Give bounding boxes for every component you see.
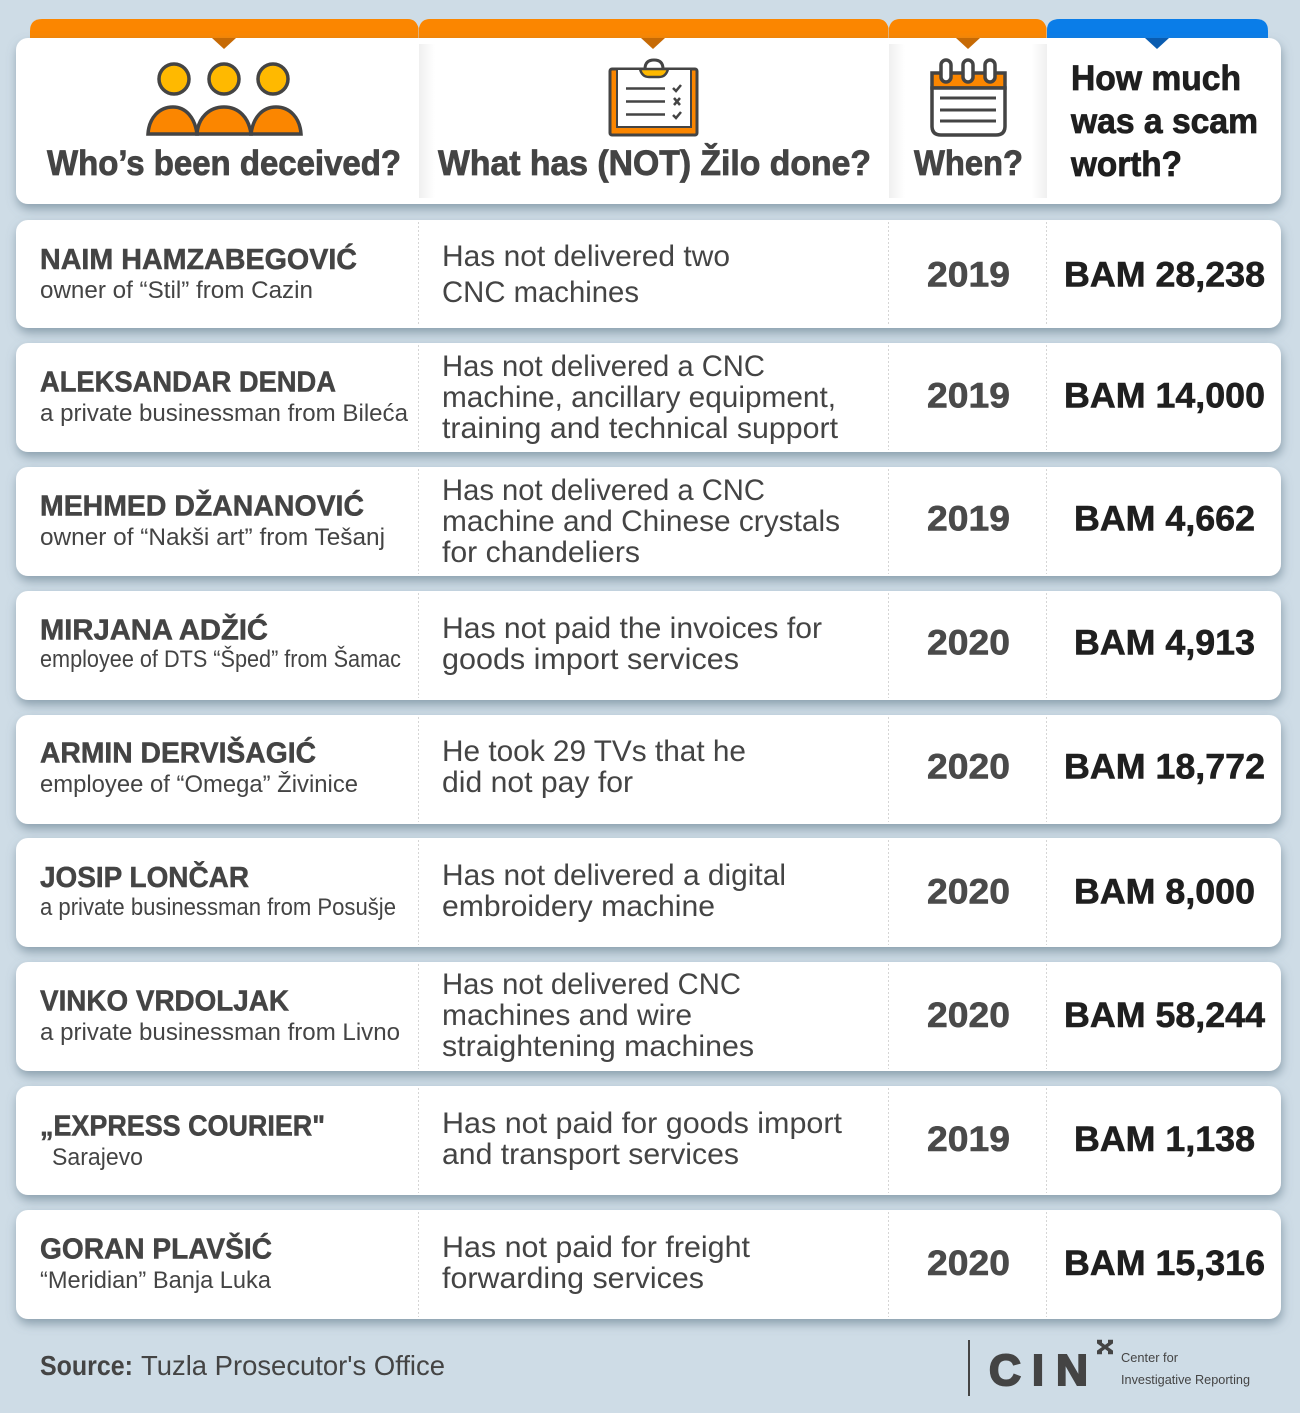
row 2: Aleksandar Denda: Has not delivered a CNC — [442, 350, 765, 383]
row 9: Goran Plavšić: forwarding services — [442, 1262, 704, 1295]
row 3: Mehmed Džananović: machine and Chinese crystals — [442, 505, 840, 538]
row 1: Naim Hamzabegović: 2019 — [927, 256, 1010, 294]
row 4: Mirjana Adžić — [16, 591, 1281, 700]
row 9: Goran Plavšić: 2020 — [927, 1244, 1010, 1283]
row 8: Express Courier: „EXPRESS COURIER" — [40, 1110, 325, 1142]
heading: when: When? — [914, 144, 1023, 183]
row 3: Mehmed Džananović: BAM 4,662 — [1074, 500, 1255, 538]
logo: CIN Center for Investigative Reporting: I — [1032, 1346, 1044, 1395]
logo: CIN Center for Investigative Reporting: N — [1056, 1346, 1088, 1395]
row 9: Goran Plavšić: GORAN PLAVŠIĆ — [40, 1232, 272, 1266]
row 7: Vinko Vrdoljak — [16, 962, 1281, 1071]
heading: how much was a scam worth — [1070, 59, 1258, 184]
row 2: Aleksandar Denda: 2019 — [927, 376, 1010, 416]
panel: header card — [16, 38, 1281, 204]
icon: clipboard — [610, 60, 697, 135]
row 4: Mirjana Adžić: 2020 — [927, 624, 1010, 662]
row 6: Josip Lončar: a private businessman from Posušje — [40, 894, 396, 921]
row 5: Armin Dervišagić: BAM 18,772 — [1064, 748, 1265, 786]
source note: Tuzla Prosecutor's Office — [141, 1350, 445, 1381]
row 6: Josip Lončar: embroidery machine — [442, 890, 715, 923]
row 5: Armin Dervišagić: did not pay for — [442, 766, 633, 799]
row 5: Armin Dervišagić: ARMIN DERVIŠAGIĆ — [40, 736, 316, 770]
row 9: Goran Plavšić: Has not paid for freight — [442, 1231, 751, 1264]
row 5: Armin Dervišagić: 2020 — [927, 748, 1010, 786]
logo: CIN Center for Investigative Reporting — [968, 1340, 1250, 1396]
row 9: Goran Plavšić — [16, 1210, 1281, 1319]
row 4: Mirjana Adžić: MIRJANA ADŽIĆ — [40, 612, 268, 646]
row 1: Naim Hamzabegović: BAM 28,238 — [1064, 256, 1265, 294]
row 1: Naim Hamzabegović: NAIM HAMZABEGOVIĆ — [40, 242, 357, 276]
row 2: Aleksandar Denda: training and technical support — [442, 412, 839, 445]
row 4: Mirjana Adžić: Has not paid the invoices for — [442, 612, 822, 645]
row 6: Josip Lončar: Has not delivered a digital — [442, 859, 786, 892]
row 6: Josip Lončar: JOSIP LONČAR — [40, 860, 249, 894]
row 1: Naim Hamzabegović: CNC machines — [442, 276, 639, 309]
heading: what has Žilo done: What has (NOT) Žilo done? — [438, 143, 871, 183]
row 2: Aleksandar Denda — [16, 343, 1281, 452]
heading: who has been deceived: Who’s been deceived? — [47, 144, 401, 183]
row 8: Express Courier: Sarajevo — [52, 1144, 143, 1171]
heading: how much was a scam worth: worth? — [1070, 145, 1182, 184]
row 5: Armin Dervišagić: employee of “Omega” Živinice — [40, 771, 358, 798]
row 8: Express Courier: BAM 1,138 — [1074, 1120, 1255, 1159]
row 3: Mehmed Džananović: owner of “Nakši art” from Tešanj — [40, 524, 385, 551]
row 4: Mirjana Adžić: goods import services — [442, 643, 739, 676]
logo: CIN Center for Investigative Reporting: Center for — [1121, 1350, 1179, 1365]
row 3: Mehmed Džananović: Has not delivered a CNC — [442, 474, 765, 507]
row 7: Vinko Vrdoljak: 2020 — [927, 996, 1010, 1035]
row 7: Vinko Vrdoljak: machines and wire — [442, 999, 692, 1032]
row 5: Armin Dervišagić — [16, 715, 1281, 824]
row 6: Josip Lončar — [16, 838, 1281, 947]
row 2: Aleksandar Denda: BAM 14,000 — [1064, 376, 1265, 416]
row 3: Mehmed Džananović: for chandeliers — [442, 536, 640, 569]
row 7: Vinko Vrdoljak: Has not delivered CNC — [442, 968, 741, 1001]
row 1: Naim Hamzabegović: Has not delivered two — [442, 240, 730, 273]
row 5: Armin Dervišagić: He took 29 TVs that he — [442, 735, 746, 768]
heading: how much was a scam worth: was a scam — [1070, 102, 1258, 141]
row 8: Express Courier: Has not paid for goods import — [442, 1107, 843, 1140]
row 7: Vinko Vrdoljak: a private businessman from Livno — [40, 1019, 400, 1046]
row 2: Aleksandar Denda: machine, ancillary equipment, — [442, 381, 836, 414]
row 7: Vinko Vrdoljak: straightening machines — [442, 1030, 754, 1063]
row 8: Express Courier: 2019 — [927, 1120, 1010, 1159]
row 9: Goran Plavšić: BAM 15,316 — [1064, 1244, 1265, 1283]
icon: calendar — [932, 60, 1005, 135]
logo: CIN Center for Investigative Reporting: Investigative Reporting — [1121, 1372, 1250, 1387]
row 1: Naim Hamzabegović — [16, 220, 1281, 328]
row 1: Naim Hamzabegović: owner of “Stil” from Cazin — [40, 277, 313, 304]
row 8: Express Courier — [16, 1086, 1281, 1195]
row 7: Vinko Vrdoljak: VINKO VRDOLJAK — [40, 986, 289, 1018]
row 4: Mirjana Adžić: employee of DTS “Šped” from Šamac — [40, 645, 401, 673]
row 2: Aleksandar Denda: a private businessman from Bileća — [40, 400, 409, 427]
row 6: Josip Lončar: BAM 8,000 — [1074, 872, 1255, 912]
row 9: Goran Plavšić: “Meridian” Banja Luka — [40, 1267, 272, 1294]
row 4: Mirjana Adžić: BAM 4,913 — [1074, 624, 1255, 662]
row 3: Mehmed Džananović: MEHMED DŽANANOVIĆ — [40, 488, 364, 522]
source note: Source: — [40, 1350, 133, 1381]
row 6: Josip Lončar: 2020 — [927, 872, 1010, 912]
icon: three people — [148, 64, 301, 134]
row 7: Vinko Vrdoljak: BAM 58,244 — [1064, 996, 1266, 1035]
row 3: Mehmed Džananović — [16, 467, 1281, 576]
heading: how much was a scam worth: How much — [1071, 59, 1241, 98]
row 2: Aleksandar Denda: ALEKSANDAR DENDA — [40, 366, 336, 398]
row 8: Express Courier: and transport services — [442, 1138, 739, 1171]
column header tabs — [30, 19, 1268, 38]
logo: CIN Center for Investigative Reporting: C — [989, 1346, 1021, 1395]
row 3: Mehmed Džananović: 2019 — [927, 500, 1010, 538]
